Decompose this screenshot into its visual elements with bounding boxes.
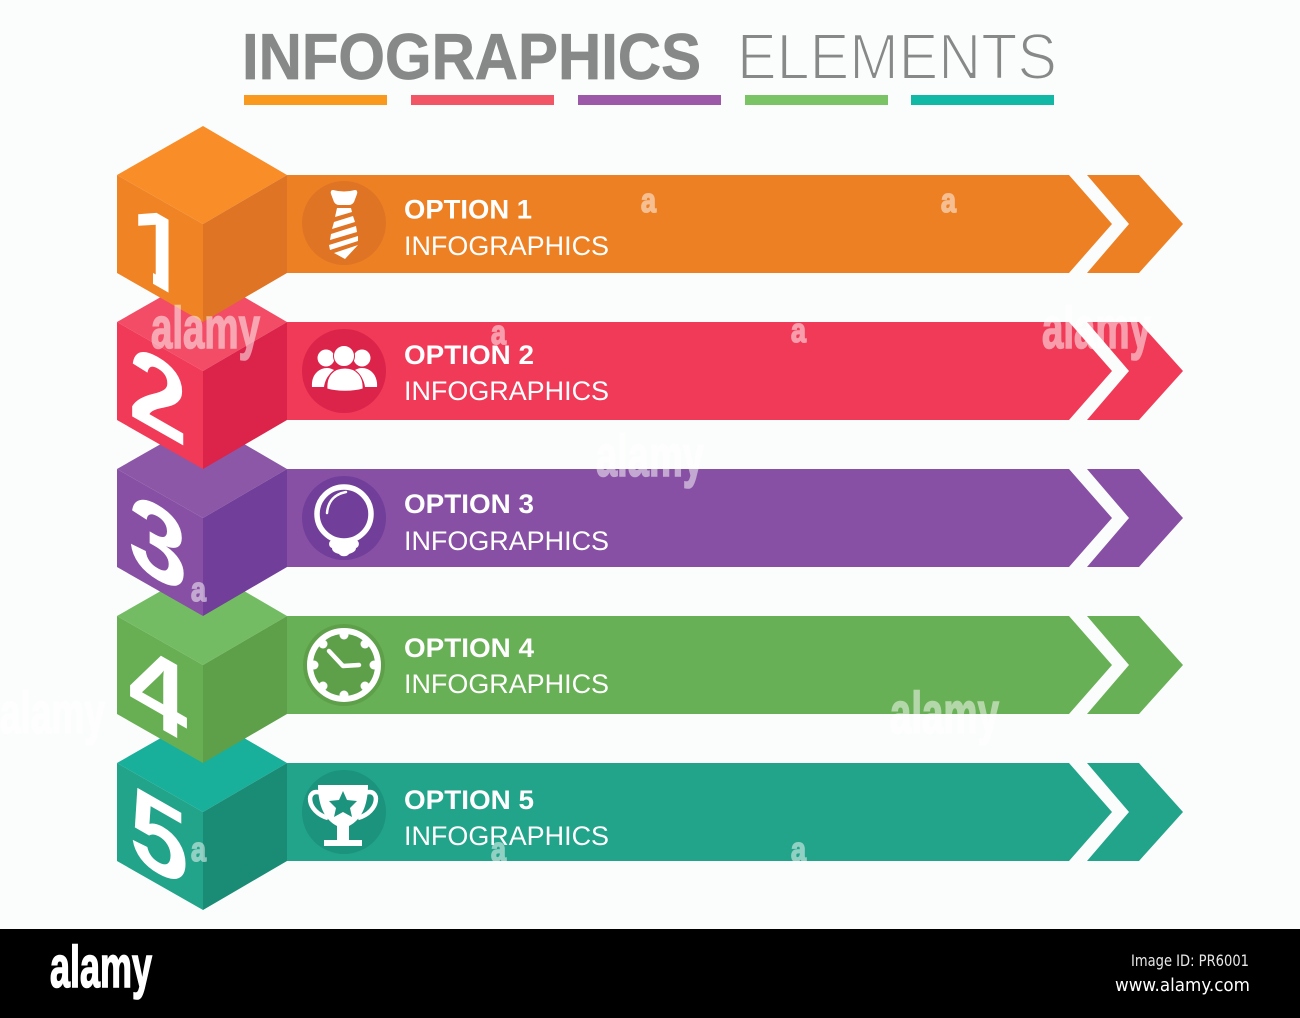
cube 1: 1 xyxy=(131,177,190,328)
title colour bars xyxy=(244,95,1054,105)
title xyxy=(242,20,1057,93)
cube 3: 3 xyxy=(129,468,187,619)
icon: tie xyxy=(302,181,386,265)
label 4 xyxy=(404,633,609,699)
watermarks: a xyxy=(491,831,507,869)
watermarks xyxy=(0,182,1151,869)
arrow 4 xyxy=(287,616,1183,714)
icon: trophy xyxy=(302,770,386,854)
cube 4: 4 xyxy=(129,616,187,767)
title: bold word: INFOGRAPHICS xyxy=(242,20,701,93)
watermarks: alamy xyxy=(596,424,704,489)
label 5: INFOGRAPHICS xyxy=(404,821,609,851)
icon: clock xyxy=(303,624,385,706)
cube 4 xyxy=(117,567,287,767)
label 3 xyxy=(404,489,609,556)
label 4: INFOGRAPHICS xyxy=(404,669,609,699)
label 5: OPTION 5 xyxy=(404,785,534,815)
label 4: OPTION 4 xyxy=(404,633,534,663)
panel: option 1 xyxy=(117,126,1183,328)
footer image id: Image ID: PR6001 xyxy=(1131,951,1249,970)
icon: light bulb xyxy=(302,476,386,560)
label 1: INFOGRAPHICS xyxy=(404,231,609,261)
cube 2: 2 xyxy=(129,320,187,471)
panel: option 5 xyxy=(117,714,1183,913)
watermarks: alamy xyxy=(0,681,105,746)
label 5 xyxy=(404,785,609,851)
watermarks: a xyxy=(641,182,657,220)
label 2 xyxy=(404,340,609,406)
watermarks: a xyxy=(491,314,507,352)
label 3: OPTION 3 xyxy=(404,489,534,519)
arrow 1 xyxy=(287,175,1183,273)
watermarks: a xyxy=(791,312,807,350)
watermarks: a xyxy=(191,831,207,869)
watermarks: a xyxy=(941,182,957,220)
watermarks: alamy xyxy=(1042,296,1151,361)
icon: people xyxy=(302,329,386,413)
panel: option 2 xyxy=(117,273,1183,471)
label 2: OPTION 2 xyxy=(404,340,534,370)
label 1: OPTION 1 xyxy=(404,194,532,224)
cube 3 xyxy=(117,420,287,619)
footer logo: alamy xyxy=(50,935,152,1000)
cube 5: 5 xyxy=(130,762,188,913)
label 2: INFOGRAPHICS xyxy=(404,376,609,406)
watermarks: a xyxy=(191,571,207,609)
footer band xyxy=(0,929,1300,1018)
cube 2 xyxy=(117,273,287,471)
panel: option 3 xyxy=(117,420,1183,619)
label 3: INFOGRAPHICS xyxy=(404,526,609,556)
footer url: www.alamy.com xyxy=(1115,975,1250,996)
cube 5 xyxy=(117,714,287,913)
arrow 3 xyxy=(287,469,1183,567)
panel: option 4 xyxy=(117,567,1183,767)
arrow 2 xyxy=(287,322,1183,420)
label 1 xyxy=(404,194,609,261)
title: light word: ELEMENTS xyxy=(737,20,1057,93)
watermarks: alamy xyxy=(890,681,999,746)
cube 1 xyxy=(117,126,287,328)
watermarks: a xyxy=(791,831,807,869)
arrow 5 xyxy=(287,763,1183,861)
watermarks: alamy xyxy=(151,296,260,361)
